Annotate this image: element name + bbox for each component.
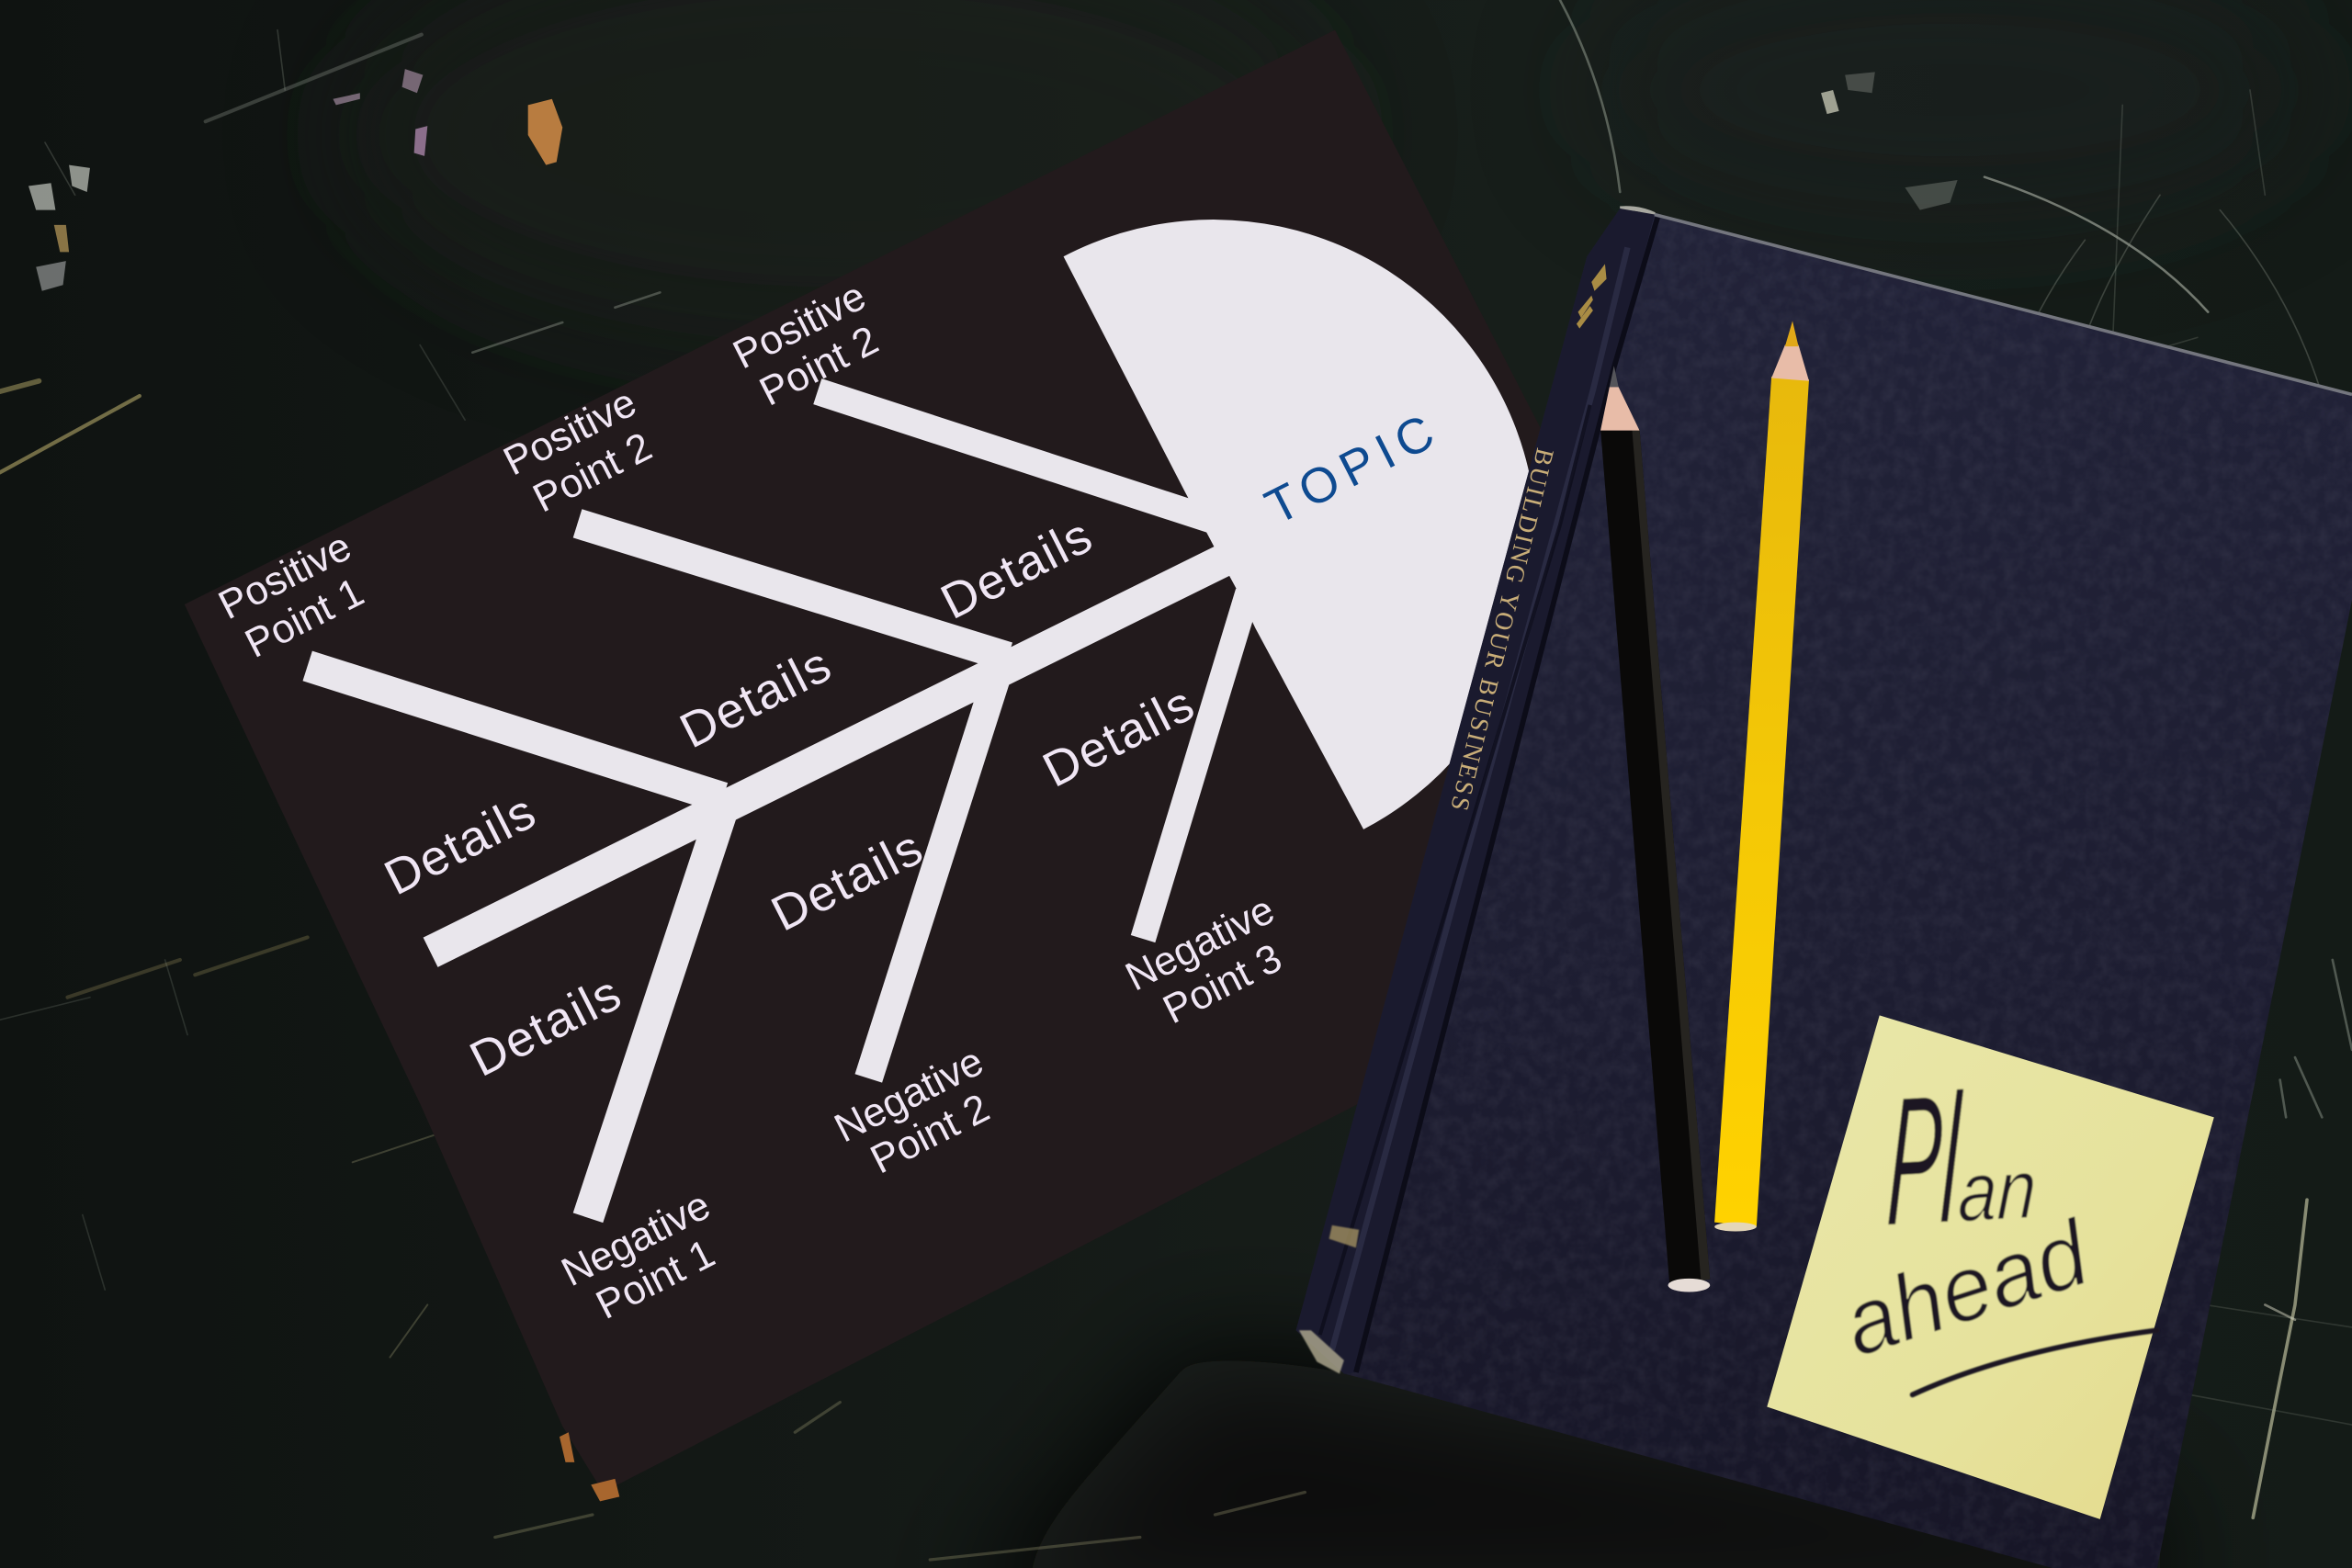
- handwritten text: ahead: [1831, 1200, 2102, 1377]
- pencil wood tip: [1600, 387, 1639, 431]
- underline stroke: [1913, 1330, 2157, 1394]
- paper background: [185, 30, 1575, 1493]
- upper bone 3: [818, 391, 1223, 524]
- topic label: TOPIC: [1257, 401, 1449, 536]
- lower bone 3: [1143, 592, 1248, 939]
- notebook cover: [1296, 209, 2352, 1568]
- topic head shape: [1064, 220, 1537, 829]
- notebook spine: [1296, 209, 1655, 1374]
- chips in the desk paint: [28, 69, 1958, 291]
- label: positive point 2 left: [496, 380, 659, 521]
- spine title: BUILDING YOUR BUSINESS: [1444, 446, 1559, 816]
- yellow pencil: [1714, 321, 1809, 1231]
- label: positive point 2 left: Positive: [496, 380, 643, 484]
- note paper: [1767, 1015, 2214, 1519]
- label: positive point 1: [211, 524, 371, 667]
- label: negative point 3: Point 3: [1156, 935, 1289, 1032]
- label: positive point 1: Positive: [211, 524, 358, 628]
- pencil end cap: [1668, 1279, 1710, 1292]
- label: negative point 3: Negative: [1118, 887, 1282, 999]
- label: positive point 2 right: Positive: [726, 274, 873, 378]
- worn corner: [1299, 1330, 1344, 1374]
- lower bone 1: [588, 799, 726, 1218]
- notebook top edge highlight: [1655, 215, 2352, 394]
- details labels: [376, 507, 1204, 1088]
- spine: [431, 553, 1238, 953]
- label: negative point 1: Point 1: [589, 1231, 722, 1328]
- pencil body: [1714, 377, 1809, 1227]
- upper bone 2: [578, 524, 1008, 657]
- paper sheet with fishbone diagram: [185, 30, 1575, 1501]
- label: positive point 2 right: Point 2: [752, 318, 886, 415]
- cover texture: [1368, 239, 2352, 1565]
- details labels: Details: [1035, 675, 1204, 798]
- notebook: [1290, 195, 2352, 1568]
- pencil end cap: [1714, 1223, 1757, 1231]
- details labels: Details: [763, 819, 932, 942]
- paper torn corner chips: [560, 1432, 619, 1501]
- label: negative point 1: Negative: [555, 1182, 718, 1295]
- lower bone 2: [868, 660, 1002, 1078]
- black pencil: [1600, 366, 1710, 1292]
- details labels: Details: [376, 784, 545, 906]
- details labels: Details: [933, 507, 1102, 630]
- pencil body: [1600, 429, 1710, 1284]
- pencil wood tip: [1771, 345, 1809, 381]
- details labels: Details: [672, 637, 841, 759]
- label: positive point 2 right: [726, 274, 886, 415]
- upper bone 1: [308, 666, 723, 798]
- label: negative point 2: Point 2: [864, 1085, 996, 1182]
- details labels: Details: [461, 964, 630, 1088]
- label: positive point 2 left: Point 2: [526, 423, 659, 521]
- label: positive point 1: Point 1: [238, 570, 371, 667]
- fishbone lines: [308, 391, 1248, 1218]
- spine gold marks: [1577, 264, 1607, 329]
- sticky note: [1767, 1015, 2214, 1519]
- handwritten text: [1831, 1052, 2157, 1394]
- label: negative point 2: Negative: [828, 1039, 990, 1151]
- handwritten text: Plan: [1884, 1052, 2041, 1265]
